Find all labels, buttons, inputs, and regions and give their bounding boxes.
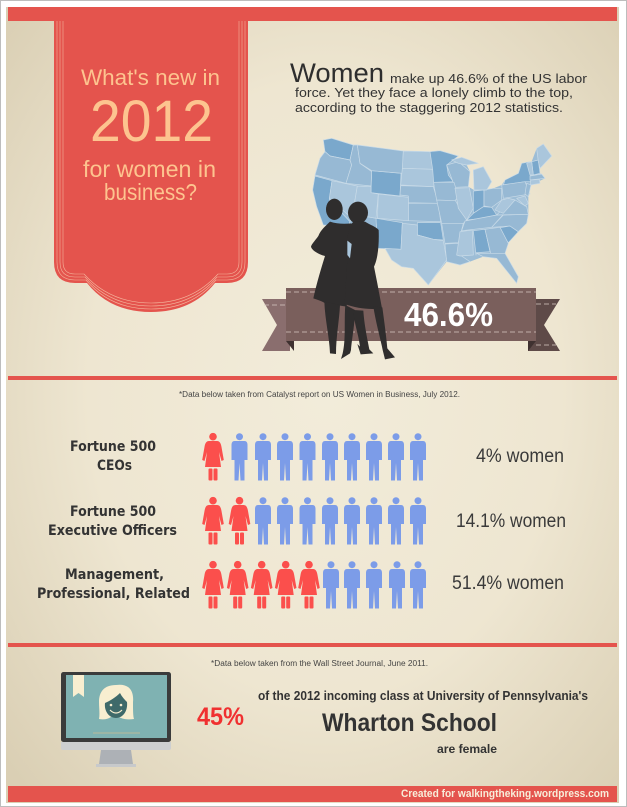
divider bar 2 (8, 643, 617, 647)
silhouette of two women (311, 199, 395, 359)
row 2: Fortune 500 Executive Officers (48, 497, 566, 544)
intro text: force. Yet they face a lonely climb to the top, (295, 85, 573, 100)
row 2 value: 14.1% women (456, 510, 566, 532)
row 1 label (70, 439, 156, 474)
row 3 pictogram (202, 561, 426, 608)
ribbon value: 46.6% (404, 296, 493, 333)
row 3: Management, Professional, Related (37, 561, 564, 608)
banner: title ribbon (54, 21, 248, 312)
title text: What's new in (81, 65, 220, 90)
bottom red bar with credit (8, 786, 617, 802)
intro text: make up 46.6% of the US labor (390, 71, 588, 86)
row 1 pictogram (202, 433, 426, 480)
row 1: Fortune 500 CEOs (70, 433, 564, 480)
Wharton text block: of the 2012 incoming class at University of Pennsylvania's (258, 689, 588, 703)
45% figure: 45% (197, 703, 244, 731)
row 2 label: Fortune 500 (70, 504, 156, 520)
intro text: Women (290, 58, 384, 88)
ribbon: 46.6% (262, 288, 560, 351)
title text: business? (104, 179, 197, 205)
title text: for women in (83, 156, 216, 182)
icon: computer monitor with woman (61, 672, 171, 767)
intro text (290, 58, 588, 115)
divider bar 1 (8, 376, 617, 380)
intro text: according to the staggering 2012 statistics. (295, 100, 563, 115)
row 2 label (48, 504, 177, 539)
Wharton text block: are female (437, 742, 497, 756)
map of the US (313, 138, 552, 285)
title text (81, 65, 220, 205)
row 2 label: Executive Officers (48, 523, 177, 539)
row 2 pictogram (202, 497, 426, 544)
title text: 2012 (90, 89, 213, 154)
row 3 label: Professional, Related (37, 586, 190, 602)
Wharton text block (258, 689, 588, 756)
bottom red bar with credit: Created for walkingtheking.wordpress.com (401, 788, 609, 800)
row 1 label: Fortune 500 (70, 439, 156, 455)
Wharton text block: Wharton School (322, 709, 497, 737)
row 1 value: 4% women (476, 445, 564, 467)
top red bar (8, 7, 617, 21)
footnote: Wall Street Journal: *Data below taken from the Wall Street Journal, June 2011. (211, 659, 428, 668)
footnote: Catalyst: *Data below taken from Catalyst report on US Women in Business, July 2012. (179, 390, 460, 399)
row 3 value: 51.4% women (452, 572, 564, 594)
row 3 label (37, 567, 190, 602)
row 3 label: Management, (65, 567, 164, 583)
row 1 label: CEOs (97, 458, 132, 474)
